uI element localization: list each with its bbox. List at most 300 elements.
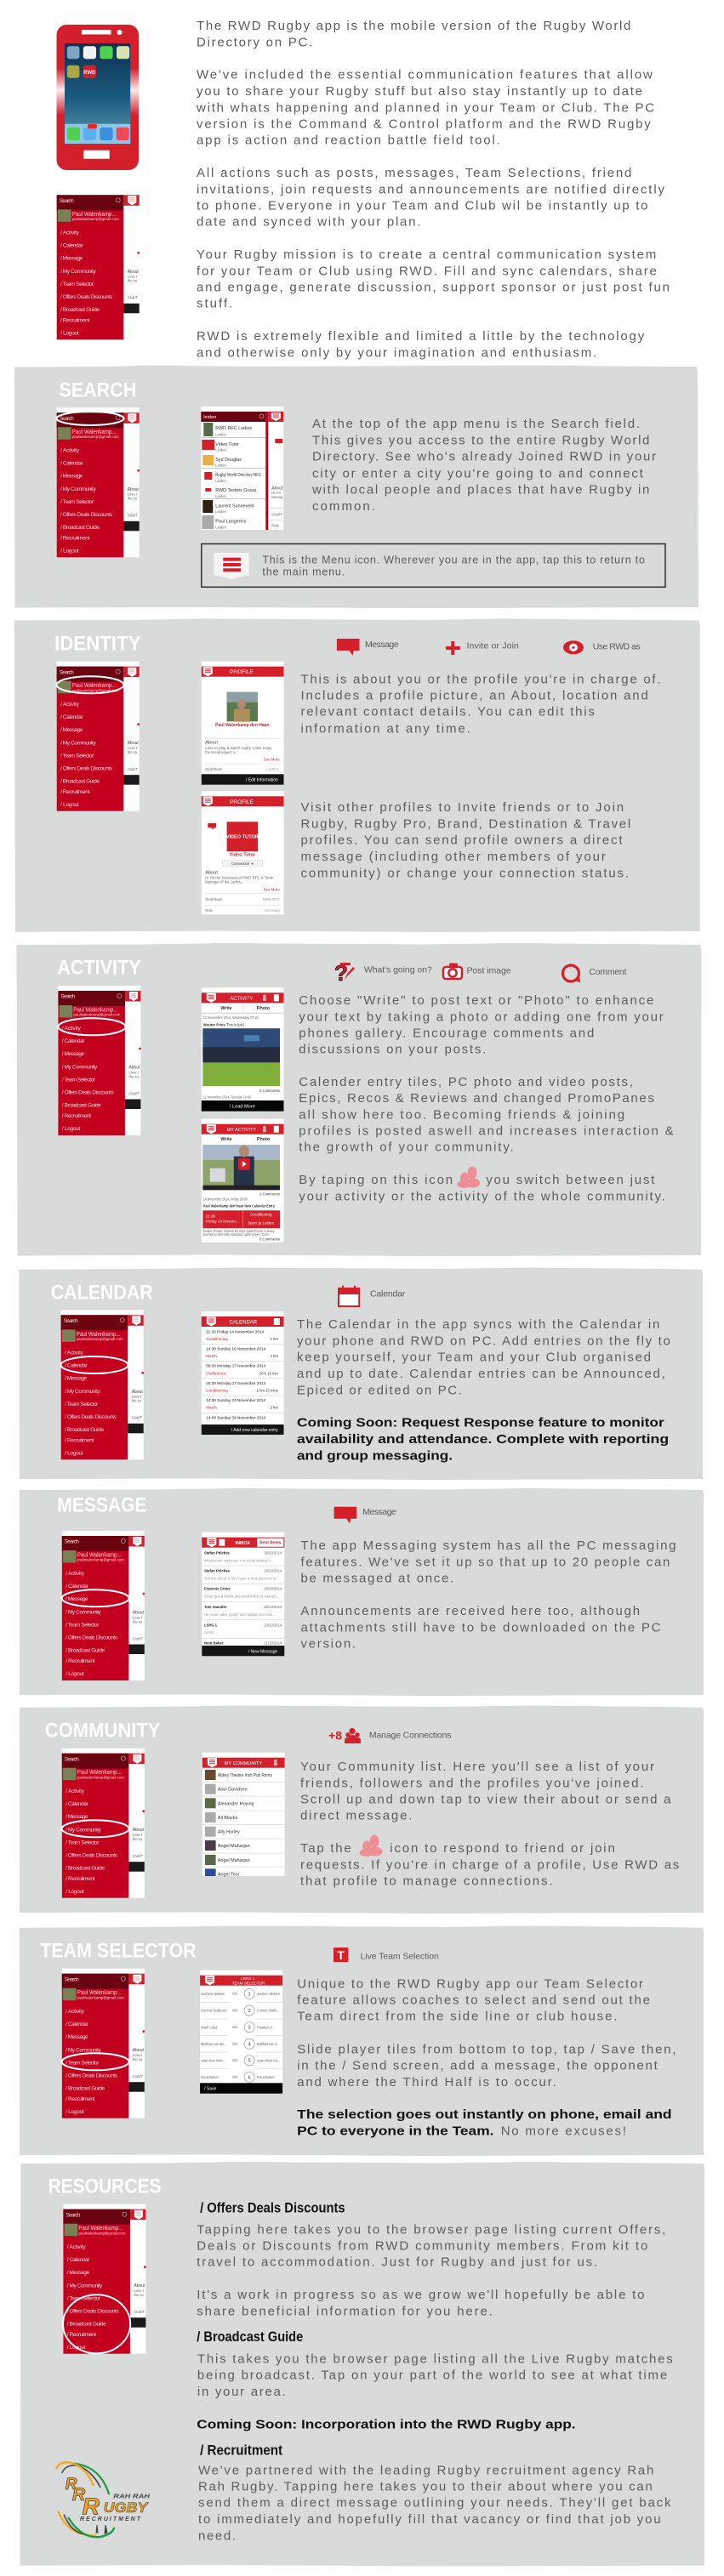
identity text: community) or change your connection status. [301,866,629,880]
icon: calendar: Calendar [370,1288,406,1299]
app menu with message highlighted: / Recruitment [66,1658,95,1664]
app menu with message highlighted: Love t [133,1615,143,1619]
app menu with resources highlighted: / Logout [67,2345,86,2351]
app menu with resources highlighted: Club/T [134,2310,145,2314]
team selector screenshot: 5 [248,2059,251,2064]
team selector screenshot: Arjan Klein Hofm... [201,2058,225,2062]
team selector screenshot: Connor Olafs... [257,2009,279,2013]
intro: text block: stuff. [197,297,232,311]
app menu with resources highlighted: Love t [134,2289,145,2293]
search results screenshot: Club/T [271,512,282,517]
icon: comment: Comment [589,967,626,977]
inbox screenshot: Okay great thank, we would like to visit yo... [204,1595,279,1599]
team selector text: No more excuses! [501,2124,626,2138]
community text: direct message. [300,1809,412,1823]
app menu with activity highlighted: / Team Selector [62,1078,96,1083]
search results screenshot: Role [271,524,280,527]
app menu with resources highlighted: / Team Selector [67,2295,101,2301]
search results screenshot: Manag [271,495,283,499]
intro: app menu screenshot: Club/T [128,296,138,300]
identity text: relevant contact details. You can edit this [301,705,595,719]
search results screenshot: RWD RFC Ladies [215,426,252,431]
profile screenshot: organisation: Hi I'm the Secretary of RWD RFC & Team [205,875,274,879]
team selector screenshot: 1 [248,1992,251,1997]
team selector screenshot: Jochem Nieben [201,1992,225,1996]
inbox screenshot: INBOX [235,1541,250,1546]
profile screenshot: person: Paul Walenkamp den Haan [215,723,270,728]
heading: identity: IDENTITY [54,633,141,656]
app menu with team selector highlighted: Paul Walenkamp... [77,1988,122,1996]
calendar screenshot: 2 hrs [270,1337,278,1341]
search text: Directory. See who's already Joined RWD in your [312,450,656,464]
inbox screenshot [202,1533,284,1656]
resources text: / Recruitment [200,2442,282,2458]
app menu with search highlighted: Search [60,416,74,422]
identity text [301,672,660,880]
community list screenshot: Alexander Hoying [218,1801,254,1806]
calendar text: Epiced or edited on PC. [297,1383,462,1397]
team selector text: and where the Third Half is to occur. [297,2075,556,2090]
app menu with team selector highlighted: / Recruitment [66,2096,95,2102]
profile screenshot: person: Love to play & watch rugby. I also enjoy [205,746,272,750]
app menu with message highlighted: / Team Selector [66,1623,100,1629]
app menu with calendar highlighted: / Calendar [65,1363,88,1369]
app menu with team selector highlighted: / My Community [66,2047,102,2053]
search results screenshot: Hi I'm [271,491,281,495]
profile screenshot: organisation: Secretary [265,908,281,913]
team selector text: PC to everyone in the Team. [297,2124,493,2138]
app menu with message highlighted: / Message [66,1596,88,1602]
intro: app menu screenshot: / Activity [60,230,80,236]
inbox screenshot: 21/10/2014 [264,1641,282,1646]
icon: message [337,639,399,656]
app menu with search highlighted: / Calendar [60,460,84,466]
identity text: Rugby, Rugby Pro, Brand, Destination & Travel [301,816,630,831]
calendar screenshot: 14:00 Sunday 23 November 2014 [206,1398,266,1402]
activity feed screenshot: 11 November 2014, Tuesday 18:43 [203,1095,251,1099]
resources text: It's a work in progress so as we grow we'll hopefully be able to [197,2288,644,2302]
inbox screenshot: Francois Crous [204,1587,231,1591]
app menu with calendar highlighted: About [132,1390,143,1395]
search text: At the top of the app menu is the Search field. [312,417,640,431]
calendar screenshot: 14:30 Sunday 16 November 2014 [206,1346,266,1351]
panel: community [20,1706,704,1914]
team selector screenshot: 2 [248,2009,251,2014]
app menu with team selector highlighted: the so [133,2057,143,2061]
my activity screenshot: 1 Comments [259,1192,280,1197]
icon: message [334,1507,396,1524]
calendar screenshot: 4 hrs [270,1354,278,1358]
profile screenshot: organisation: Role [205,908,214,913]
intro: text block: you to share your Rugby stuff but also stay instantly up to date [197,84,642,99]
intro: app menu screenshot: / Message [60,255,83,262]
heading: resources: RESOURCES [48,2175,162,2198]
icon: live team selection [333,1948,439,1962]
app menu with calendar highlighted: Search [64,1318,78,1324]
team selector text [297,1976,676,2138]
app menu with resources highlighted: / Activity [67,2244,86,2250]
my activity screenshot: Paul Walenkamp den Haan New Calendar Entry [203,1204,275,1208]
callout: menu icon [202,544,665,587]
profile screenshot: person: See More [264,758,280,762]
calendar screenshot: 18:30 Monday 17 November 2014 [206,1381,266,1385]
icon: people switch [458,1167,480,1188]
intro: phone illustration [56,25,139,170]
identity text: This is about you or the profile you're in charge of. [301,672,660,686]
app menu with resources highlighted: Search [66,2212,81,2218]
app menu with activity highlighted: / My Community [62,1065,98,1071]
calendar screenshot: CALENDAR [229,1320,258,1325]
resources text: to immediately and hopefully fill that vacancy or find that job you [198,2512,661,2527]
intro: text block: and otherwise only by your imagination and enthusiasm. [197,345,596,360]
community text: friends, followers and the profiles you've joined. [300,1776,643,1790]
intro: app menu screenshot: Paul Walenkamp... [72,210,117,218]
app menu with team selector highlighted [62,1969,145,2118]
icon: message: Message [365,640,399,650]
inbox screenshot: Sent Items [259,1541,282,1546]
resources text: need. [198,2528,236,2543]
team selector screenshot: LSRG 1 [241,1976,255,1981]
calendar screenshot: 20 h 15 min [259,1371,278,1375]
icon: people requests [359,1835,383,1857]
profile screenshot: organisation: VIDEO TUTOR [226,834,259,839]
search text: city or enter a city you're going to and connect [312,466,644,481]
intro: text block: RWD is extremely flexible and limited a little by the technology [197,329,645,344]
intro: text block: to phone. Everyone in your Team and Club wil be instantly up to [197,198,648,213]
calendar text [297,1317,670,1463]
app menu with profile highlighted: / Recruitment [60,789,89,795]
app menu with activity highlighted: Paul Walenkamp... [73,1005,117,1014]
inbox screenshot: 23/10/2014 [264,1623,282,1627]
app menu with profile highlighted: / Activity [60,702,80,708]
app menu with team selector highlighted: / Activity [66,2009,85,2015]
team selector screenshot: Mark User [201,2025,218,2029]
activity text: discussions on your posts. [299,1043,486,1057]
search results screenshot [201,407,283,530]
inbox screenshot: whats more important in a social setting? t... [204,1558,274,1562]
app menu with search highlighted: / Offers Deals Discounts [60,512,113,518]
intro: app menu screenshot: / Team Selector [60,281,94,287]
community list screenshot: Alan Davidsen [218,1788,248,1793]
community text [300,1760,679,1888]
app menu with message highlighted: / Calendar [66,1584,89,1589]
app menu with resources highlighted: the so [134,2293,144,2297]
app menu with calendar highlighted: / Activity [65,1351,84,1356]
intro: app menu screenshot: paulwalenkamp@gmail.com [72,217,119,221]
calendar screenshot: 09:00 Monday 17 November 2014 [206,1364,266,1368]
team selector screenshot: Connor Grahoon [201,2009,227,2013]
team selector text: Slide player tiles from bottom to top, tap / Save then, [297,2042,676,2056]
app menu with calendar highlighted [61,1310,144,1459]
intro: phone illustration: RWD [83,71,96,76]
app menu with community highlighted: Paul Walenkamp... [77,1768,122,1776]
resources text: in your area. [197,2385,286,2399]
resources text: travel to accommodation. Just for Rugby and just for us. [197,2255,597,2269]
calendar text: Coming Soon: Request Response feature to monitor [297,1416,664,1430]
team selector screenshot [200,1970,282,2094]
callout: menu icon: This is the Menu icon. Wherever you are in the app, tap this to return to [262,554,645,566]
icon: post image: Post image [466,966,511,976]
app menu with profile highlighted: / Offers Deals Discounts [60,765,113,771]
app menu with profile highlighted: Search [60,669,74,675]
icon: manage connections [328,1728,451,1743]
message text [301,1538,676,1652]
team selector screenshot: / Save [204,2087,216,2092]
intro: text block: and engage, generate discussion, support sponsor or just post fun [197,281,670,295]
app menu with message highlighted: / Logout [66,1671,84,1677]
community text: Scroll up and down tap to view their about or send a [300,1792,671,1806]
app menu with resources highlighted: / Broadcast Guide [67,2321,106,2327]
resources text: We've partnered with the leading Rugby recruitment agency Rah [198,2463,653,2477]
activity text: Epics, Recos & Reviews and changed PromoPanes [299,1091,654,1106]
search results screenshot: Leiden [215,509,227,514]
icon: comment [563,965,626,983]
app menu with search highlighted: / Activity [60,447,80,453]
team selector screenshot: Nout Beker [201,2075,219,2079]
profile screenshot: organisation: About [205,870,218,875]
inbox screenshot: 29/10/2014 [264,1587,282,1591]
icon: what's going on: ? [334,960,348,986]
intro: app menu screenshot: Search [60,198,74,204]
search results screenshot: Leiden [215,479,227,483]
app menu with resources highlighted: / Offers Deals Discounts [67,2308,119,2314]
icon: use RWD as [563,640,641,654]
resources text: being broadcast. Tap on your part of the world to see at what time [197,2368,667,2383]
message text: attachments still have to be downloaded on the PC [301,1620,661,1635]
community text: that profile to manage connections. [300,1874,553,1888]
search results screenshot: RWD Testers Group [215,488,256,493]
panel: activity [17,943,701,1256]
calendar text: and group messaging. [297,1448,453,1463]
community text: Tap the [300,1841,351,1856]
resources text: / Offers Deals Discounts [200,2200,345,2216]
activity feed screenshot: ACTIVITY [230,997,253,1002]
icon: what's going on [334,960,432,986]
profile screenshot: person: About [205,741,218,746]
app menu with team selector highlighted: About [133,2048,144,2053]
intro: text block: app is action and reaction battle field tool. [197,134,500,148]
app menu with community highlighted: / Team Selector [66,1840,100,1845]
app menu with team selector highlighted: Love t [133,2053,143,2057]
calendar screenshot: 11:30 Friday 14 November 2014 [206,1329,265,1333]
app menu with calendar highlighted: Club/T [132,1416,142,1420]
app menu with message highlighted: / Broadcast Guide [66,1648,105,1654]
app menu with activity highlighted: / Logout [62,1126,81,1132]
activity text: phones gallery. Encourage comments and [299,1026,594,1040]
activity feed screenshot: Wouter Prins This is [pic] [203,1022,244,1026]
app menu with message highlighted: Paul Walenkamp... [77,1551,122,1558]
activity text: your text by taking a photo or adding one from your [299,1009,664,1024]
app menu with search highlighted: paulwalenkamp@gmail.com [72,435,119,439]
intro: text block: version is the Command & Control platform and the RWD Rugby [197,117,651,131]
app menu with message highlighted: paulwalenkamp@gmail.com [77,1558,124,1562]
my activity screenshot: MY ACTIVITY [226,1128,256,1133]
app menu with profile highlighted [56,662,140,811]
logo: Rah Rah Rugby Recruitment: RAH RAH [113,2492,151,2500]
resources text: Deals or Discounts from RWD community members. From kit to [197,2238,647,2253]
team selector text: feature allows coaches to select and send out the [297,1993,650,2008]
heading: community: COMMUNITY [45,1719,161,1742]
icon: what's going on: What's going on? [364,964,432,975]
my activity screenshot: Friday 14 Novem... [206,1220,239,1224]
resources text: share beneficial information for you here. [197,2304,493,2318]
resources text: Coming Soon: Incorporation into the RWD Rugby app. [197,2417,576,2431]
intro: app menu screenshot [57,190,140,339]
heading: activity: ACTIVITY [57,956,141,979]
profile screenshot: person: Club/Team [205,767,223,771]
app menu with search highlighted: the so [128,497,138,501]
my activity screenshot: 0 Comments [259,1237,280,1242]
profile screenshot: person: / Edit Information [246,778,278,783]
app menu with message highlighted: About [133,1611,144,1616]
search results screenshot: Rugby World Directory RFC [215,473,261,478]
app menu with team selector highlighted: / Logout [66,2109,84,2115]
intro: text block: Directory on PC. [197,35,312,49]
calendar screenshot: Conditioning [206,1389,228,1393]
icon: invite or join: Invite or Join [466,640,519,651]
inbox screenshot: Stefan Polches [204,1568,231,1572]
team selector screenshot: Arjan Klein Ho... [257,2058,280,2062]
resources text: / Broadcast Guide [197,2329,303,2345]
app menu with activity highlighted: Club/T [128,1091,140,1095]
intro: text block: invitations, join requests and announcements are notified directly [197,182,664,196]
community list screenshot: Angel Maharjan [218,1858,250,1863]
intro: text block: date and synced with your plan. [197,215,420,230]
icon: menu [214,553,249,579]
app menu with team selector highlighted: / Broadcast Guide [66,2085,105,2091]
icon: manage connections: Manage Connections [369,1731,451,1741]
team selector screenshot: 6 [248,2075,251,2080]
activity text: profiles is posted aswell and increases interaction & [299,1123,674,1138]
my activity screenshot: 14 November 2014, Friday 09:00 [203,1197,248,1202]
inbox screenshot: 30/10/2014 [264,1568,282,1572]
app menu with calendar highlighted: Paul Walenkamp... [77,1330,121,1338]
search text: with local people and places that have Rugby in [311,482,649,497]
resources text [197,2200,673,2543]
search results screenshot: Paul Langereis [215,519,247,524]
app menu with activity highlighted: the so [128,1074,139,1078]
profile screenshot: organisation: PROFILE [230,799,254,805]
app menu with community highlighted: paulwalenkamp@gmail.com [77,1775,124,1779]
app menu with message highlighted: / Offers Deals Discounts [66,1635,118,1641]
inbox screenshot: 30/10/2014 [264,1550,282,1555]
intro: app menu screenshot: / My Community [60,269,96,275]
search results screenshot: Laurent Sonneveld [215,503,254,509]
team selector screenshot: 3 [248,2026,251,2031]
intro: app menu screenshot: / Logout [60,330,79,337]
app menu with search highlighted: / Message [60,473,83,479]
my activity screenshot: Conditioning [250,1213,272,1217]
app menu with community highlighted: / My Community [66,1827,102,1833]
heading: calendar: CALENDAR [51,1282,153,1305]
panel: team selector [20,1925,704,2156]
my activity screenshot: Sport ja Leiden [248,1221,275,1225]
profile screenshot: organisation [202,791,284,914]
icon: live team selection: T [337,1948,345,1962]
panel: calendar [19,1267,703,1480]
identity text: Includes a profile picture, an About, location and [301,689,648,703]
app menu with search highlighted: / Team Selector [60,499,94,505]
app menu with community highlighted: / Recruitment [66,1876,95,1882]
search results screenshot: Video Tutor [215,442,239,447]
app menu with search highlighted: Club/T [128,514,138,518]
app menu with community highlighted: Club/T [133,1854,144,1858]
app menu with search highlighted: / Logout [60,548,79,554]
community list screenshot: Angel Maharjan [218,1844,250,1849]
team selector screenshot: Position 3 [257,2025,273,2029]
app menu with activity highlighted: / Recruitment [62,1113,91,1119]
inbox screenshot: Tell me about it. We have a tour planned to... [204,1576,279,1580]
my activity screenshot: barrow to alternate standing cable press. Core. [203,1232,270,1237]
activity feed screenshot: 0 Comments [259,1089,280,1093]
activity text: By taping on this icon [299,1173,453,1187]
app menu with search highlighted: Paul Walenkamp... [72,428,117,435]
app menu with community highlighted [62,1749,145,1898]
inbox screenshot: / New Message [248,1649,278,1654]
intro: app menu screenshot: / Offers Deals Discounts [60,294,113,300]
team selector screenshot: Matthias van d... [257,2042,279,2046]
app menu with profile highlighted: / Logout [60,802,79,808]
app menu with community highlighted: About [133,1828,144,1833]
calendar screenshot: 14:00 Sunday 30 November 2014 [206,1416,266,1420]
app menu with activity highlighted: paulwalenkamp@gmail.com [73,1013,121,1017]
app menu with team selector highlighted: / Calendar [66,2022,89,2027]
intro: text block: Your Rugby mission is to create a central communication system [197,247,656,262]
app menu with profile highlighted: Club/T [128,767,138,771]
intro: app menu screenshot: / Calendar [60,243,84,248]
intro: text block: We've included the essential communication features that allow [197,68,653,82]
community list screenshot: Abbey Theatre Irish Pub Roma [218,1773,272,1778]
app menu with message highlighted: Search [65,1539,79,1545]
app menu with search highlighted: / My Community [60,486,96,492]
app menu with calendar highlighted: / Message [65,1376,88,1382]
app menu with search highlighted: / Broadcast Guide [60,525,100,531]
inbox screenshot: Stefan Polches [204,1550,231,1555]
community text: icon to respond to friend or join [390,1841,615,1856]
message text: The app Messaging system has all the PC messaging [301,1538,676,1553]
profile screenshot: organisation: Club/Team [205,897,223,901]
app menu with calendar highlighted: / My Community [65,1389,100,1395]
calendar text: your phone and RWD on PC. Add entries on the fly to [297,1333,670,1348]
app menu with community highlighted: / Offers Deals Discounts [66,1852,118,1858]
my activity screenshot: 11:30 [206,1214,215,1219]
logo: Rah Rah Rugby Recruitment: R [83,2494,100,2520]
calendar screenshot [202,1311,284,1435]
app menu with community highlighted: / Logout [66,1889,84,1895]
profile screenshot: person: the social aspect o... [205,750,237,754]
search results screenshot: Leiden [215,494,227,498]
intro: app menu screenshot: / Recruitment [60,318,89,323]
team selector text: Unique to the RWD Rugby app our Team Selector [297,1976,643,1991]
app menu with message highlighted [62,1531,145,1680]
team selector screenshot: TEAM SELECTOR [232,1982,265,1986]
community list screenshot: Angel Test [218,1872,239,1877]
community list screenshot: Ally Hurley [218,1830,240,1835]
search results screenshot: About [271,486,283,492]
resources text: This takes you the browser page listing all the Live Rugby matches [197,2351,673,2366]
app menu with team selector highlighted: / Team Selector [66,2060,100,2066]
app menu with calendar highlighted: / Broadcast Guide [65,1427,104,1433]
app menu with team selector highlighted: / Offers Deals Discounts [66,2073,118,2078]
search results screenshot: Syd Douglas [215,458,242,463]
activity text: the growth of your community. [299,1140,514,1155]
app menu with search highlighted: Love t [128,492,138,497]
inbox screenshot: Nout Beker [204,1641,224,1646]
profile screenshot: organisation: Manager of the Ladies... [205,880,243,884]
app menu with profile highlighted: the so [128,750,138,754]
app menu with resources highlighted: Paul Walenkamp... [78,2224,123,2232]
app menu with team selector highlighted: Club/T [133,2074,144,2078]
